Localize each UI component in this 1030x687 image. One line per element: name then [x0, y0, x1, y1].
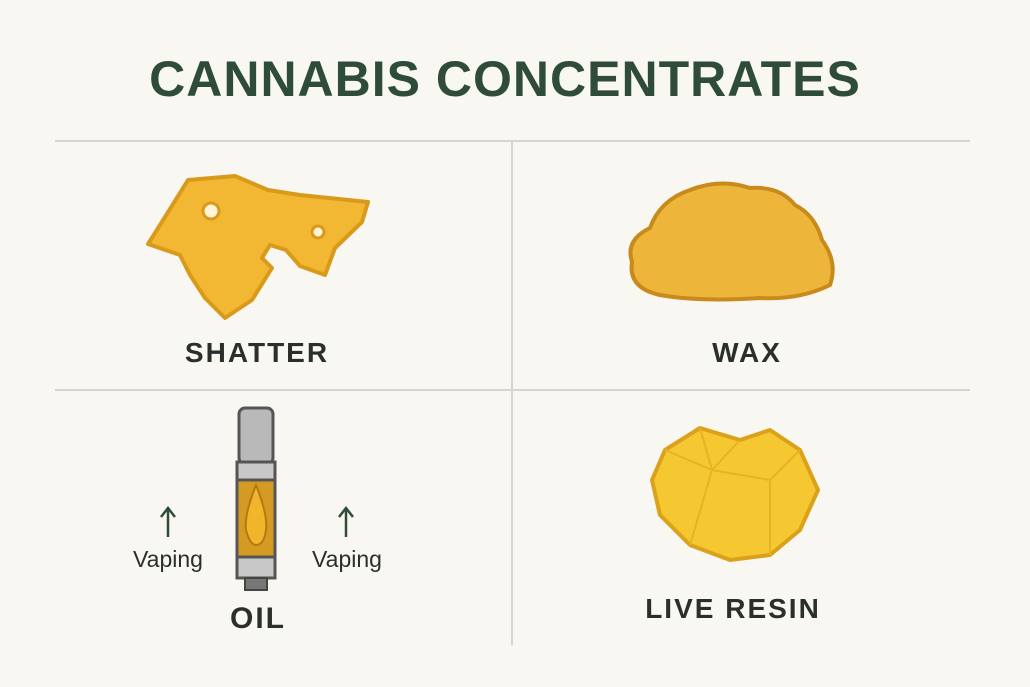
label: live resin: LIVE RESIN: [645, 593, 821, 624]
arrow left: [161, 508, 175, 537]
title: CANNABIS CONCENTRATES: [149, 51, 861, 107]
label: shatter: SHATTER: [185, 337, 329, 368]
label: wax: WAX: [712, 337, 782, 368]
icon: wax: [630, 183, 833, 299]
text: vaping right: Vaping: [312, 546, 382, 572]
icon: live resin: [652, 428, 818, 560]
label: oil: OIL: [230, 602, 286, 635]
icon: oil cartridge: [237, 408, 275, 590]
arrow right: [339, 508, 353, 537]
icon: shatter: [148, 176, 368, 318]
text: vaping left: Vaping: [133, 546, 203, 572]
